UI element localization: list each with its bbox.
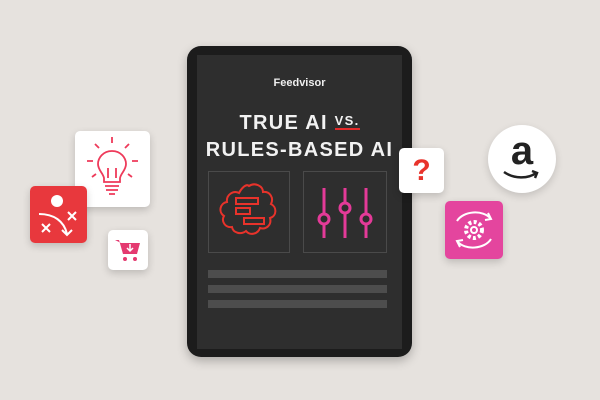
title bbox=[206, 112, 393, 161]
panel: brain icon bbox=[208, 171, 290, 253]
icon: gear sync card bbox=[445, 201, 503, 259]
logo: Feedvisor: Feedvisor bbox=[274, 77, 325, 89]
tablet bbox=[187, 46, 412, 357]
icon: strategy card bbox=[30, 186, 87, 243]
icon: cart card bbox=[108, 230, 148, 270]
icon: question card: ? bbox=[412, 154, 431, 187]
icon: amazon circle: a bbox=[511, 129, 533, 173]
screen bbox=[197, 55, 402, 349]
icon: amazon circle bbox=[488, 125, 556, 193]
panel: sliders icon bbox=[303, 171, 387, 253]
icon: question card bbox=[399, 148, 444, 193]
icon: lightbulb card bbox=[75, 131, 150, 207]
title: RULES-BASED AI bbox=[206, 139, 393, 161]
title: TRUE AI VS. bbox=[239, 112, 360, 134]
text lines bbox=[208, 270, 387, 308]
